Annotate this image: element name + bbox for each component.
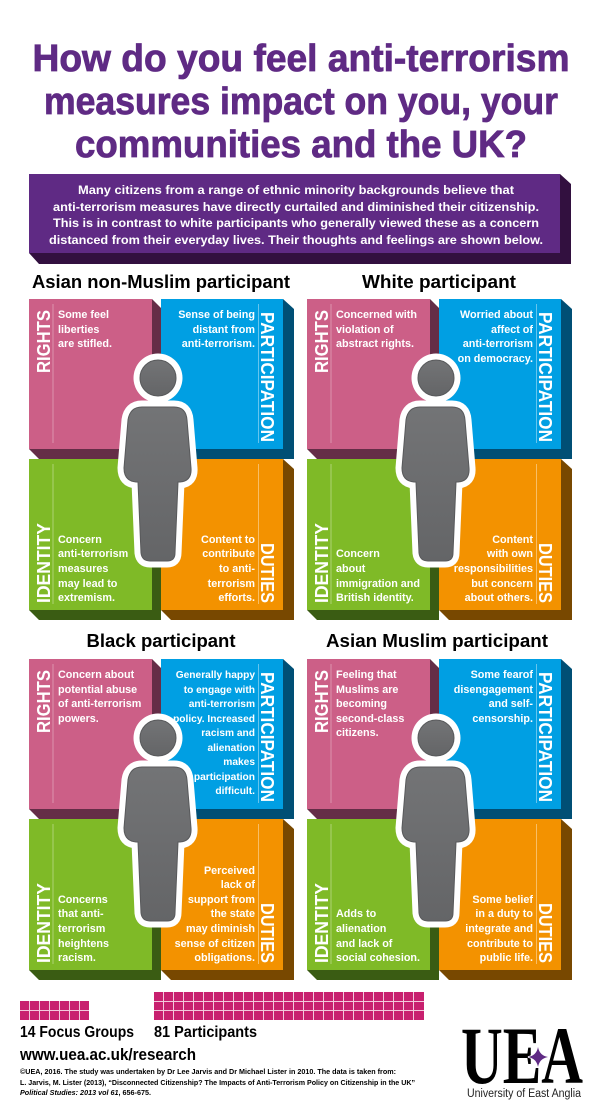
quadrant: rights: potential abuse (58, 684, 137, 696)
icon: person (402, 354, 469, 561)
quadrant: rights: citizens. (336, 727, 379, 739)
quadrant: participation: difficult. (215, 786, 255, 797)
quadrant: rights: are stifled. (58, 338, 112, 350)
quadrant: duties: DUTIES (535, 903, 555, 963)
quadrant: rights: RIGHTS (34, 670, 54, 733)
quadrant: identity: terrorism (58, 923, 105, 935)
panel: introduction: anti-terrorism measures have directly curtailed and diminished their citizenship. (53, 200, 539, 214)
quadrant: identity (307, 819, 439, 980)
quadrant: participation: disengagement (454, 684, 533, 696)
quadrant: identity: immigration and (336, 578, 420, 590)
quadrant: identity: IDENTITY (34, 883, 54, 963)
panel: Black participant (29, 631, 294, 980)
quadrant: duties: DUTIES (535, 543, 555, 603)
heading: White participant (362, 272, 516, 292)
source credits: Political Studies: 2013 vol 61, 656-675. (20, 1088, 151, 1097)
quadrant: duties: but concern (471, 578, 533, 590)
quadrant: rights: violation of (336, 324, 394, 336)
panel: introduction (29, 174, 571, 264)
quadrant: duties: support from (188, 894, 255, 906)
quadrant: identity: may lead to (58, 578, 118, 590)
quadrant: rights: of anti-terrorism (58, 698, 141, 710)
quadrant: identity: extremism. (58, 592, 115, 604)
quadrant: identity: alienation (336, 923, 386, 935)
quadrant: duties: may diminish (186, 923, 255, 935)
quadrant: duties: DUTIES (257, 543, 277, 603)
panel: Asian non-Muslim participant (29, 272, 294, 620)
quadrant: identity: IDENTITY (312, 523, 332, 603)
quadrant: identity: IDENTITY (34, 523, 54, 603)
quadrant: rights (29, 299, 161, 459)
quadrant: duties: public life. (480, 952, 533, 964)
quadrant: duties (439, 459, 572, 620)
quadrant: participation (439, 659, 572, 819)
quadrant: participation (161, 299, 294, 459)
quadrant: participation (439, 299, 572, 459)
quadrant: duties: terrorism (208, 578, 255, 590)
pictogram: 81 participants (154, 992, 424, 1020)
icon: star (528, 1047, 548, 1067)
panel: Asian Muslim participant (307, 631, 572, 980)
source credits (20, 1067, 415, 1097)
quadrant: participation (161, 659, 294, 819)
source credits: ©UEA, 2016. The study was undertaken by Dr Lee Jarvis and Dr Michael Lister in 2010. The data is taken from: (20, 1067, 396, 1076)
quadrant: participation: anti-terrorism (189, 699, 255, 710)
website url: www.uea.ac.uk/research (19, 1045, 196, 1064)
quadrant: rights: RIGHTS (312, 670, 332, 733)
quadrant: identity: that anti- (58, 908, 104, 920)
quadrant: participation: and self- (489, 698, 533, 710)
quadrant: rights: Feeling that (336, 669, 397, 681)
quadrant: participation: affect of (491, 324, 533, 336)
quadrant: participation: racism and (201, 728, 255, 739)
icon: person (124, 714, 191, 921)
quadrant: participation: on democracy. (458, 353, 533, 365)
label: participants: 81 Participants (154, 1024, 257, 1041)
quadrant: identity: Concern (336, 548, 380, 560)
quadrant: identity: heightens (58, 938, 109, 950)
heading: Asian non-Muslim participant (32, 272, 290, 292)
quadrant: rights (307, 299, 439, 459)
quadrant: identity: Concerns (58, 894, 108, 906)
quadrant: duties: contribute (202, 548, 255, 560)
quadrant: rights: abstract rights. (336, 338, 414, 350)
quadrant: rights: powers. (58, 713, 99, 725)
title: measures impact on you, your (44, 81, 558, 123)
quadrant: participation: policy. Increased (173, 714, 255, 725)
quadrant: duties: Some belief (472, 894, 533, 906)
quadrant: identity: Concern (58, 534, 102, 546)
quadrant: duties: the state (211, 908, 255, 920)
logo: University of East Anglia: University of East Anglia (467, 1088, 582, 1100)
title (32, 38, 570, 166)
quadrant: participation: PARTICIPATION (535, 312, 555, 442)
icon: person (124, 354, 191, 561)
quadrant: identity (29, 459, 161, 620)
quadrant: duties: DUTIES (257, 903, 277, 963)
quadrant: duties: Content to (201, 534, 255, 546)
quadrant: identity: social cohesion. (336, 952, 420, 964)
quadrant: duties: Perceived (204, 865, 255, 877)
quadrant: duties: about others. (465, 592, 533, 604)
quadrant: participation: Worried about (460, 309, 533, 321)
quadrant: participation: Some fearof (471, 669, 533, 681)
quadrant: duties (161, 459, 294, 620)
quadrant: identity: IDENTITY (312, 883, 332, 963)
quadrant: duties: responsibilities (454, 563, 533, 575)
quadrant: duties: in a duty to (475, 908, 533, 920)
quadrant: participation: Sense of being (178, 309, 255, 321)
heading: Black participant (86, 631, 236, 651)
quadrant: duties (161, 819, 294, 980)
quadrant: identity (29, 819, 161, 980)
quadrant: participation: anti-terrorism. (182, 338, 255, 350)
quadrant: rights (307, 659, 439, 819)
quadrant: duties: contribute to (467, 938, 533, 950)
title: communities and the UK? (75, 124, 527, 166)
quadrant: duties: integrate and (465, 923, 533, 935)
quadrant: duties: efforts. (218, 592, 255, 604)
quadrant: rights: RIGHTS (34, 310, 54, 373)
quadrant: identity (307, 459, 439, 620)
pictogram: 14 focus groups (20, 1001, 89, 1020)
heading: Asian Muslim participant (326, 631, 548, 651)
panel: introduction: distanced from their everyday lives. Their thoughts and feelings are shown below. (49, 233, 543, 247)
quadrant: identity: anti-terrorism (58, 548, 128, 560)
quadrant: rights: becoming (336, 698, 387, 710)
quadrant: participation: censorship. (472, 713, 533, 725)
quadrant: participation: PARTICIPATION (535, 672, 555, 802)
quadrant: identity: racism. (58, 952, 96, 964)
quadrant: identity: measures (58, 563, 108, 575)
quadrant: participation: PARTICIPATION (257, 672, 277, 802)
quadrant: participation: to engage with (184, 685, 255, 696)
quadrant: rights: second-class (336, 713, 404, 725)
quadrant: duties: obligations. (194, 952, 255, 964)
title: How do you feel anti-terrorism (32, 38, 570, 80)
quadrant: duties (439, 819, 572, 980)
panel: introduction: Many citizens from a range of ethnic minority backgrounds believe that (78, 183, 514, 197)
quadrant: identity: Adds to (336, 908, 377, 920)
quadrant: duties: sense of citizen (175, 938, 255, 950)
quadrant: participation: alienation (207, 743, 255, 754)
panel: introduction: This is in contrast to white participants who generally viewed these as a concern (53, 216, 539, 230)
quadrant: participation: PARTICIPATION (257, 312, 277, 442)
quadrant: participation: distant from (193, 324, 255, 336)
quadrant: rights: Concerned with (336, 309, 417, 321)
source credits: L. Jarvis, M. Lister (2013), “Disconnected Citizenship? The Impacts of Anti-Terrorism Policy on Citizenship in the UK” (20, 1078, 415, 1087)
quadrant: rights: RIGHTS (312, 310, 332, 373)
quadrant: identity: British identity. (336, 592, 414, 604)
quadrant: rights: liberties (58, 324, 99, 336)
label: focus groups: 14 Focus Groups (20, 1024, 134, 1041)
quadrant: duties: to anti- (219, 563, 255, 575)
panel: White participant (307, 272, 572, 620)
quadrant: participation: makes (223, 757, 255, 768)
quadrant: rights: Concern about (58, 669, 135, 681)
quadrant: duties: Content (492, 534, 533, 546)
quadrant: rights: Muslims are (336, 684, 398, 696)
quadrant: rights: Some feel (58, 309, 109, 321)
quadrant: participation: anti-terrorism (463, 338, 533, 350)
quadrant: duties: lack of (221, 879, 255, 891)
icon: person (402, 714, 469, 921)
quadrant: rights (29, 659, 161, 819)
quadrant: participation: Generally happy (176, 670, 255, 681)
quadrant: identity: and lack of (336, 938, 393, 950)
quadrant: participation: participation (194, 772, 255, 783)
quadrant: duties: with own (486, 548, 533, 560)
quadrant: identity: about (336, 563, 366, 575)
